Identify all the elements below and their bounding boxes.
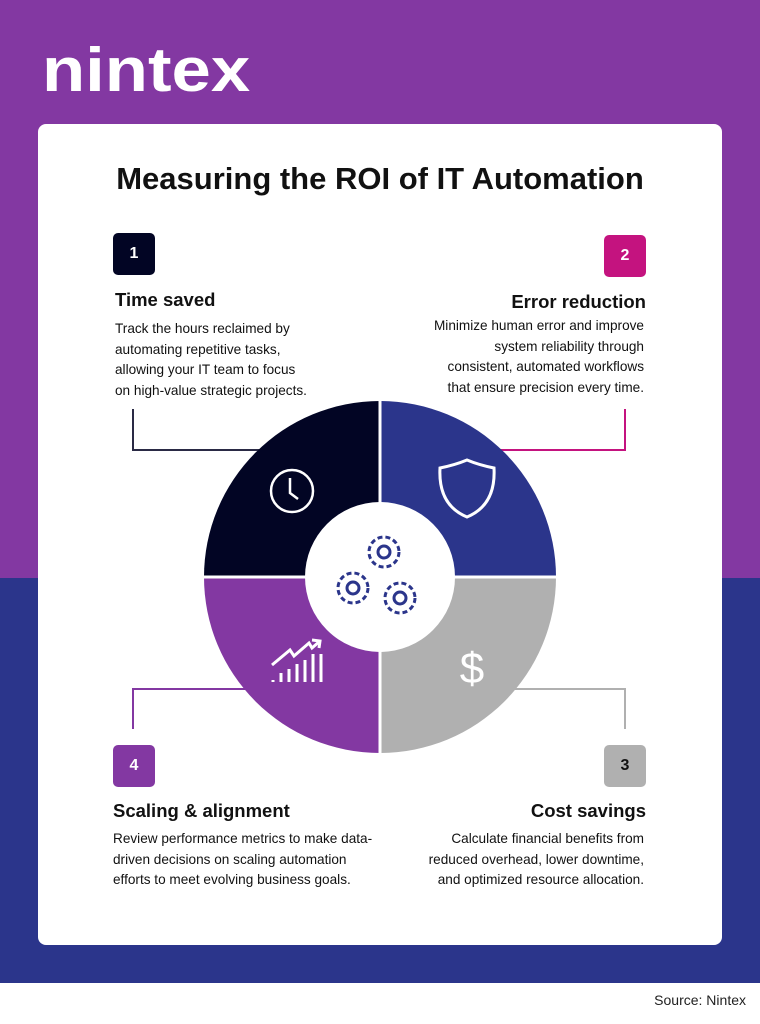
heading 2: Error reduction <box>511 291 646 312</box>
badge 2 <box>604 235 646 277</box>
text 1: allowing your IT team to focus <box>115 362 295 377</box>
text 4 <box>113 831 372 887</box>
heading 1: Time saved <box>115 289 215 310</box>
badge 3: 3 <box>621 757 629 774</box>
icon: gears <box>338 537 415 613</box>
background bottom navy <box>0 578 760 983</box>
text 4: Review performance metrics to make data- <box>113 831 372 846</box>
heading 4: Scaling & alignment <box>113 800 290 821</box>
text 2: that ensure precision every time. <box>448 380 644 394</box>
source: Source: Nintex <box>654 992 746 1008</box>
badge 4 <box>113 745 155 787</box>
icon: clock <box>271 470 313 512</box>
logo: nintex <box>42 36 250 105</box>
quadrant: error <box>380 401 556 577</box>
connectors <box>133 409 625 729</box>
heading 3: Cost savings <box>531 800 646 821</box>
icon: growth chart <box>272 640 321 682</box>
text 4: driven decisions on scaling automation <box>113 852 346 866</box>
background top purple <box>0 0 760 578</box>
icon: shield <box>440 460 494 517</box>
text 1: automating repetitive tasks, <box>115 342 280 356</box>
text 3: reduced overhead, lower downtime, <box>429 852 644 866</box>
badge 4: 4 <box>130 757 138 774</box>
text 2: system reliability through <box>494 338 644 354</box>
text 2: consistent, automated workflows <box>448 359 644 374</box>
text 3: Calculate financial benefits from <box>451 831 644 846</box>
title: Measuring the ROI of IT Automation <box>116 161 644 196</box>
text 4: efforts to meet evolving business goals. <box>113 872 351 887</box>
text 1: Track the hours reclaimed by <box>115 321 290 336</box>
text 1 <box>115 321 307 398</box>
quadrant: scaling <box>204 577 380 753</box>
icon: dollar: $ <box>460 644 484 693</box>
text 2: Minimize human error and improve <box>434 318 644 333</box>
badge 2: 2 <box>621 247 629 264</box>
text 3: and optimized resource allocation. <box>438 872 644 887</box>
text 1: on high-value strategic projects. <box>115 382 307 398</box>
quadrant: time <box>204 401 380 577</box>
quadrant: cost <box>380 577 556 753</box>
card <box>38 124 722 945</box>
badge 3 <box>604 745 646 787</box>
badge 1: 1 <box>130 245 138 262</box>
badge 1 <box>113 233 155 275</box>
text 2 <box>434 318 644 395</box>
text 3 <box>429 831 644 887</box>
